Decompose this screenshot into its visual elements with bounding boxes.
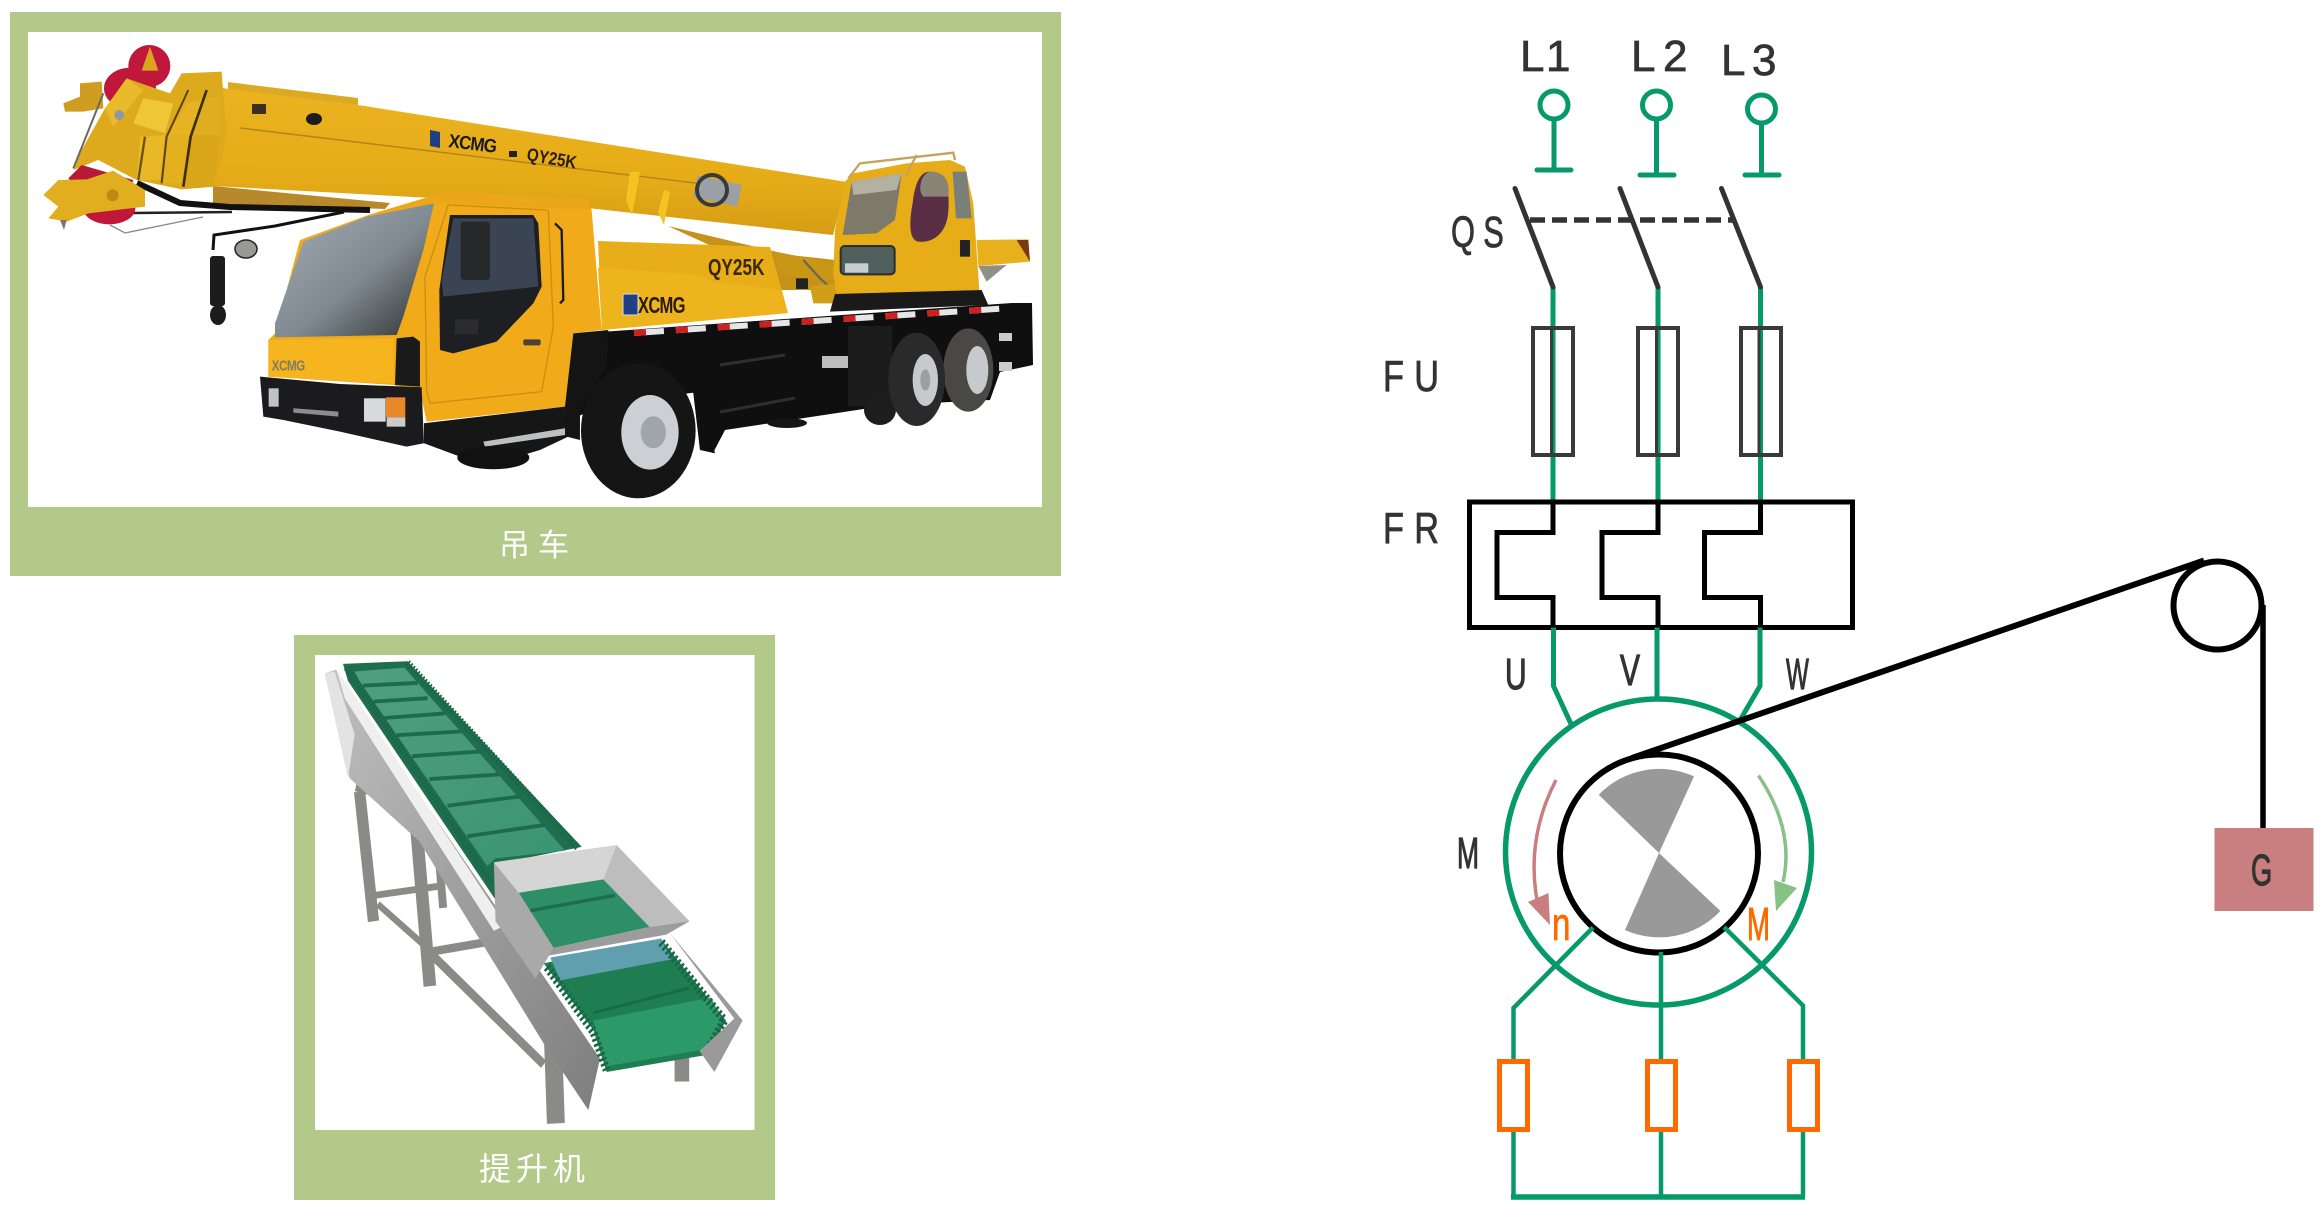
thermal relay FR xyxy=(1470,502,1852,628)
fuses FU xyxy=(1533,328,1781,455)
panel: crane photo frame xyxy=(10,12,1061,576)
rotor resistors xyxy=(1500,1062,1818,1130)
motor feed wires xyxy=(1554,628,1760,724)
rear wheels xyxy=(864,328,993,426)
crane boom head with pulleys xyxy=(43,45,227,230)
load G xyxy=(2214,828,2314,911)
labels U V W: W xyxy=(1786,649,1809,699)
torque arrow M xyxy=(1758,776,1797,911)
truck cab: XCMG xyxy=(272,357,305,374)
operator cabin xyxy=(775,153,1030,312)
conveyor green belt xyxy=(343,661,582,902)
label M torque: M xyxy=(1747,900,1770,951)
label FU: FU xyxy=(1383,352,1439,401)
conveyor steel side rail xyxy=(325,670,600,1110)
phase labels L1 L2 L3 xyxy=(1520,32,1776,85)
conveyor legs xyxy=(356,788,682,1123)
motor stator ring xyxy=(1506,699,1812,1005)
right steel rail xyxy=(670,933,743,1072)
caption: conveyor: 提升机 xyxy=(479,1151,590,1187)
illustration: crane truck xyxy=(43,45,1033,498)
phase labels L1 L2 L3: L2 xyxy=(1631,32,1687,81)
red and white reflector rail xyxy=(634,308,1010,333)
green phase wires xyxy=(1553,287,1760,504)
side box: QY25K xyxy=(708,256,765,281)
label QS: QS xyxy=(1451,209,1504,257)
side box xyxy=(598,241,788,330)
labels U V W: U xyxy=(1505,649,1527,698)
truck cab xyxy=(260,192,715,469)
circuit diagram xyxy=(1383,32,2314,1197)
crane boom xyxy=(110,82,847,235)
drive motor xyxy=(358,748,396,788)
lower belt section xyxy=(544,940,726,1072)
rotor wires xyxy=(1511,927,1805,1197)
label n: n xyxy=(1552,900,1570,950)
phase terminals xyxy=(1537,91,1779,175)
isolating switch QS xyxy=(1515,188,1760,287)
label M motor: M xyxy=(1457,828,1479,878)
load G: G xyxy=(2251,845,2272,895)
labels U V W xyxy=(1505,645,1809,699)
crane boom: QY25K xyxy=(525,144,578,173)
motor rotor xyxy=(1560,754,1758,952)
labels U V W: V xyxy=(1620,645,1640,694)
chassis frame xyxy=(570,303,1033,453)
speed arrow n xyxy=(1528,780,1556,925)
phase labels L1 L2 L3: L3 xyxy=(1721,36,1776,85)
phase labels L1 L2 L3: L1 xyxy=(1520,32,1570,81)
side mirror arm xyxy=(210,212,344,325)
illustration: conveyor hoist xyxy=(325,661,743,1123)
label FR: FR xyxy=(1383,504,1439,553)
front wheel xyxy=(581,363,696,498)
boom rear brace arm xyxy=(668,226,890,290)
panel: conveyor photo frame xyxy=(294,635,775,1200)
crane boom: XCMG xyxy=(447,130,497,157)
feed hopper xyxy=(494,845,690,979)
caption: crane: 吊车 xyxy=(499,528,577,563)
side box: XCMG xyxy=(638,293,685,319)
rope over pulley xyxy=(1632,560,2263,830)
